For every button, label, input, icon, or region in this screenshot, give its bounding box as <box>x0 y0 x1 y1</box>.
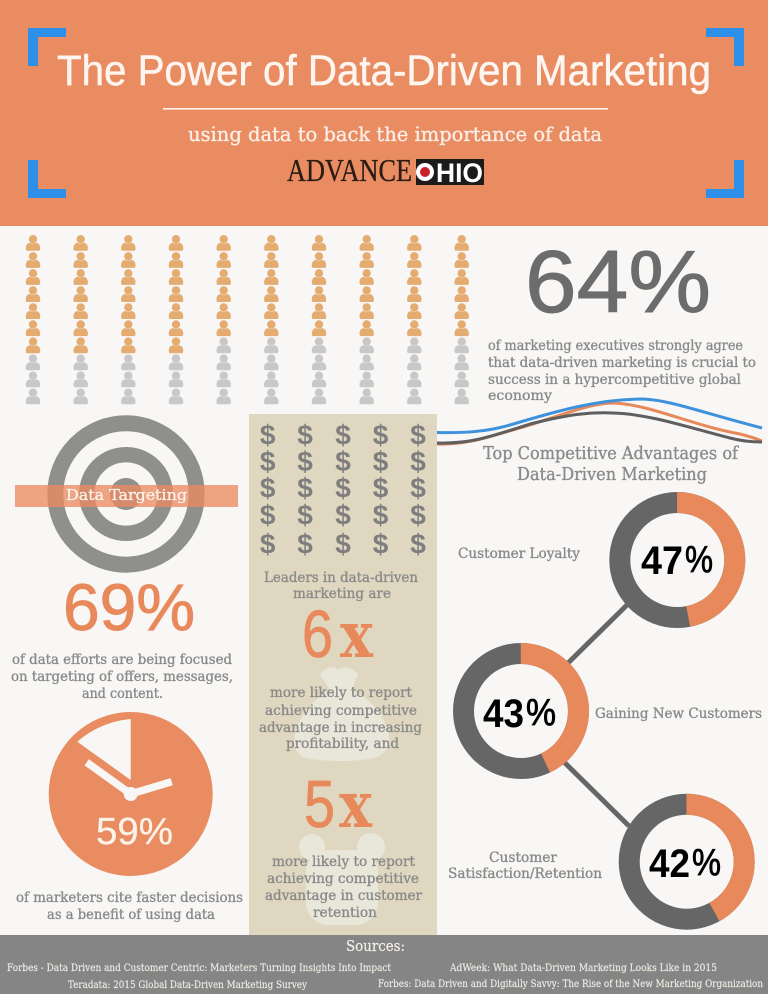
text: 59% description: of marketers cite faster decisions <box>16 890 243 906</box>
stat: 69%: 69% <box>63 570 195 644</box>
dollar sign grid: $ <box>410 500 426 530</box>
text: 64% description <box>488 338 756 404</box>
dollar sign grid: $ <box>260 446 276 477</box>
dollar sign grid: $ <box>335 472 351 504</box>
dollar sign grid: $ <box>410 528 426 560</box>
panel: data targeting <box>11 423 238 702</box>
label: customer satisfaction/retention <box>448 850 602 882</box>
dollar sign grid: $ <box>410 472 426 504</box>
stat: 6x: x <box>340 598 374 673</box>
dollar sign grid: $ <box>410 420 426 450</box>
text: 69% description: on targeting of offers, messages, <box>11 669 233 685</box>
icon: target <box>55 423 197 565</box>
source list: AdWeek: What Data-Driven Marketing Looks Like in 2015 <box>449 963 717 974</box>
icon: clock <box>49 712 213 876</box>
stat: 5x: 5 <box>304 767 335 842</box>
text: leaders intro: marketing are <box>293 586 391 602</box>
dollar sign grid: $ <box>297 472 313 504</box>
text: 59% description: as a benefit of using data <box>47 907 215 923</box>
dollar sign grid: $ <box>373 420 389 450</box>
donut: customer satisfaction 42% <box>629 804 744 919</box>
text: 64% description: that data-driven marketing is crucial to <box>488 355 756 371</box>
banner: data targeting <box>15 485 238 507</box>
text: 5x description: more likely to report <box>272 854 416 870</box>
label: customer loyalty: Customer Loyalty <box>458 546 580 562</box>
text: 6x description: more likely to report <box>270 685 413 701</box>
footer: sources <box>0 935 768 994</box>
text: 69% description <box>11 652 233 702</box>
stat: 64%: 64% <box>525 232 711 331</box>
stat: 5x <box>304 767 373 843</box>
panel: leaders in data-driven marketing <box>249 414 437 935</box>
text: 59% description <box>16 890 243 923</box>
banner: data targeting: Data Targeting <box>66 486 187 504</box>
heading: top competitive advantages: Top Competitive Advantages of <box>483 443 739 464</box>
icon: customer pawprint <box>299 833 385 925</box>
dollar sign grid: $ <box>373 528 389 560</box>
source list <box>7 963 763 991</box>
text: 64% description: economy <box>488 388 552 404</box>
heading: top competitive advantages <box>483 443 739 485</box>
dollar sign grid: $ <box>410 446 426 477</box>
text: 69% description: of data efforts are being focused <box>12 652 232 668</box>
label: customer satisfaction/retention: Customer <box>489 850 558 866</box>
text: 6x description: advantage in increasing <box>259 720 422 736</box>
text: 6x description: achieving competitive <box>265 703 417 719</box>
donut: customer satisfaction 42%: % <box>692 842 721 884</box>
text: 5x description <box>265 854 423 921</box>
dollar sign grid: $ <box>335 528 351 560</box>
header banner <box>0 0 768 226</box>
connector lines <box>564 604 629 826</box>
dollar sign grid: $ <box>373 472 389 504</box>
donut: customer loyalty 47%: % <box>685 539 713 581</box>
dollar sign grid <box>260 420 426 560</box>
pictogram: 64 of 100 people <box>26 235 469 404</box>
text: 5x description: retention <box>313 905 377 921</box>
text: leaders intro <box>264 570 418 602</box>
dollar sign grid: $ <box>260 528 276 560</box>
label: gaining new customers: Gaining New Customers <box>595 706 762 722</box>
icon: money bag <box>294 667 389 761</box>
source list: Forbes - Data Driven and Customer Centric: Marketers Turning Insights Into Impact <box>7 963 391 974</box>
donut: gaining new customers 43%: 43 <box>483 692 524 736</box>
dollar sign grid: $ <box>373 446 389 477</box>
subtitle: using data to back the importance of data <box>188 122 602 146</box>
decorative wave lines <box>437 399 762 444</box>
text: 5x description: achieving competitive <box>267 871 419 887</box>
donut: customer loyalty 47%: 47 <box>641 539 683 583</box>
corner brackets <box>28 28 744 198</box>
dollar sign grid: $ <box>335 446 351 477</box>
sources heading: Sources: <box>346 937 405 955</box>
stat: 59%: 59% <box>96 811 173 853</box>
stat: 6x: 6 <box>302 597 333 672</box>
title: The Power of Data-Driven Marketing <box>57 47 711 95</box>
logo: Advance Ohio: ADVANCE <box>287 152 412 188</box>
panel: faster decisions <box>16 712 243 923</box>
text: 64% description: of marketing executives strongly agree <box>488 338 743 354</box>
dollar sign grid: $ <box>373 500 389 530</box>
text: 69% description: and content. <box>82 686 163 702</box>
label: customer satisfaction/retention: Satisfaction/Retention <box>448 866 602 882</box>
dollar sign grid: $ <box>297 528 313 560</box>
text: 64% description: success in a hypercompetitive global <box>488 372 741 388</box>
dollar sign grid: $ <box>335 420 351 450</box>
text: leaders intro: Leaders in data-driven <box>264 570 418 586</box>
dollar sign grid: $ <box>297 420 313 450</box>
dollar sign grid: $ <box>297 446 313 477</box>
text: 6x description <box>259 685 422 752</box>
heading: top competitive advantages: Data-Driven Marketing <box>517 464 707 485</box>
donut: gaining new customers 43% <box>464 654 578 768</box>
donut: gaining new customers 43%: % <box>526 692 556 734</box>
stat: 6x <box>302 597 374 673</box>
text: 6x description: profitability, and <box>286 736 399 752</box>
dollar sign grid: $ <box>335 500 351 530</box>
donut: customer satisfaction 42%: 42 <box>649 842 690 886</box>
logo: Advance Ohio: HIO <box>436 158 483 188</box>
text: 5x description: advantage in customer <box>265 888 423 904</box>
dollar sign grid: $ <box>260 420 276 450</box>
dollar sign grid: $ <box>260 472 276 504</box>
stat: 5x: x <box>339 768 373 843</box>
dollar sign grid: $ <box>260 500 276 530</box>
source list: Teradata: 2015 Global Data-Driven Marketing Survey <box>68 980 307 991</box>
dollar sign grid: $ <box>297 500 313 530</box>
donut: customer loyalty 47% <box>620 502 735 618</box>
